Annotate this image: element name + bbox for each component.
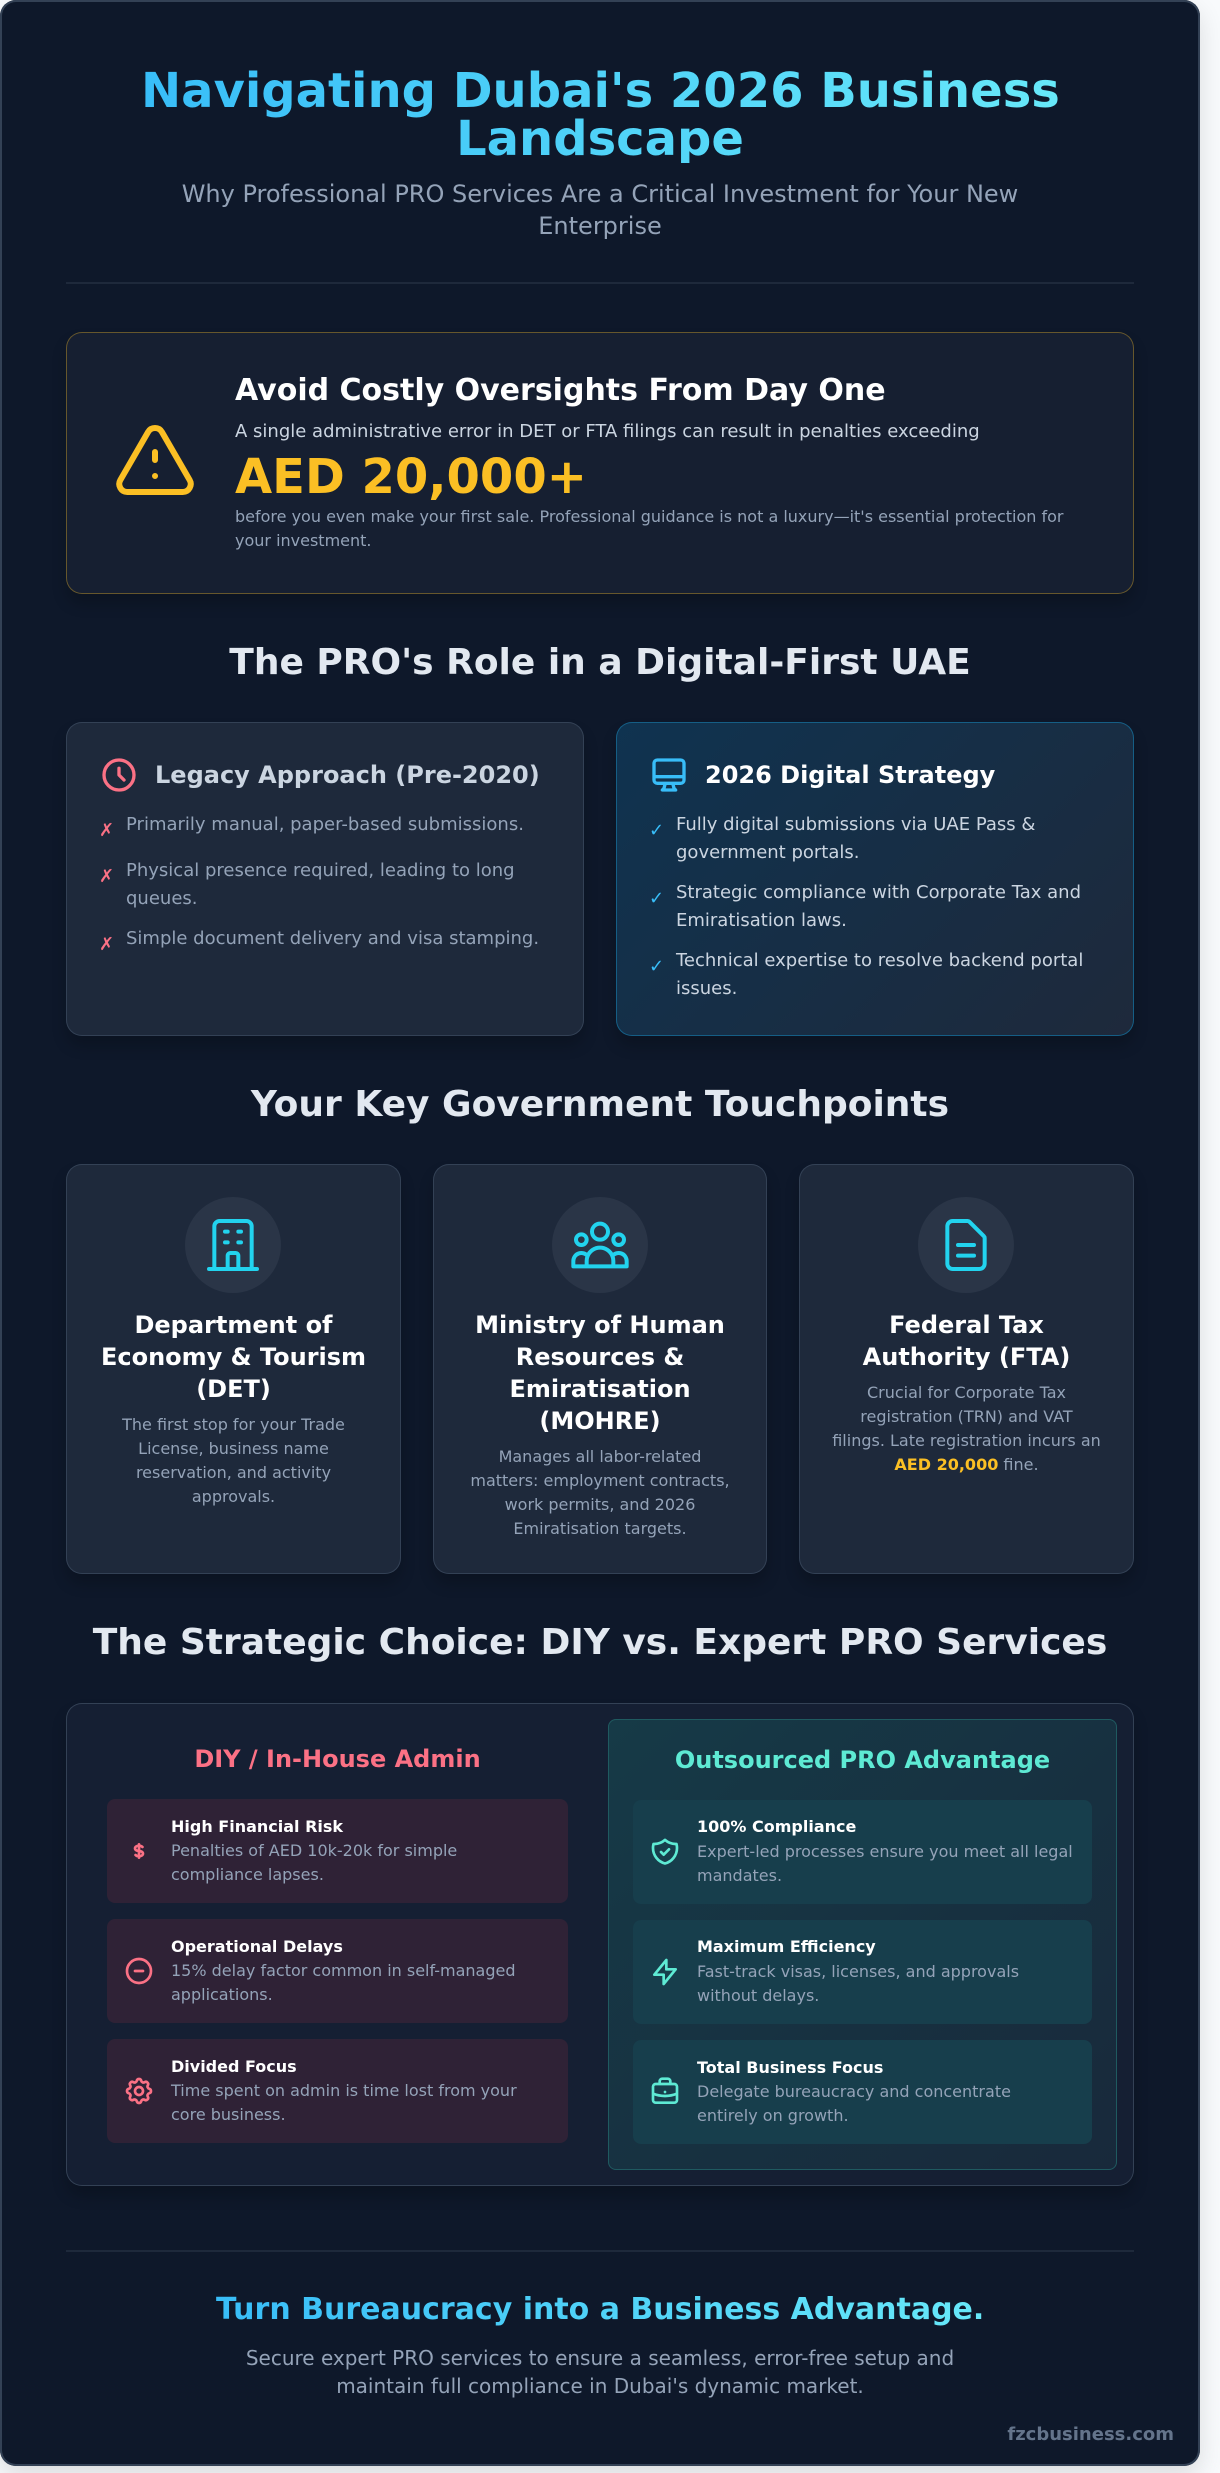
list item: Emiratisation laws. xyxy=(676,910,847,931)
digital heading: 2026 Digital Strategy xyxy=(705,761,995,789)
FTA description: filings. Late registration incurs an xyxy=(832,1431,1101,1450)
item description xyxy=(171,1961,516,2004)
list item xyxy=(126,860,515,909)
DIY item: delays xyxy=(107,1919,568,2023)
icon: briefcase xyxy=(652,2077,678,2104)
list marker: ✓ xyxy=(649,956,664,977)
list item xyxy=(676,950,1083,999)
divider under header xyxy=(66,282,1134,284)
icon: document xyxy=(945,1219,987,1271)
alert figure: AED 20,000+ xyxy=(235,449,587,505)
alert note xyxy=(235,507,1064,550)
MOHRE title: (MOHRE) xyxy=(539,1407,661,1435)
list item: Fully digital submissions via UAE Pass & xyxy=(676,814,1035,835)
FTA title xyxy=(862,1311,1070,1371)
DET description: approvals. xyxy=(192,1487,275,1506)
icon: clock xyxy=(102,758,136,792)
MOHRE description: matters: employment contracts, xyxy=(470,1471,730,1490)
MOHRE title xyxy=(475,1311,725,1435)
item title: Operational Delays xyxy=(171,1937,343,1956)
icon: desktop xyxy=(652,758,686,792)
MOHRE description: Manages all labor-related xyxy=(499,1447,701,1466)
legacy heading: Legacy Approach (Pre-2020) xyxy=(155,761,540,789)
legacy list xyxy=(99,814,539,955)
list marker: ✓ xyxy=(649,888,664,909)
item title: High Financial Risk xyxy=(171,1817,343,1836)
PRO item: efficiency xyxy=(633,1920,1092,2024)
MOHRE description: work permits, and 2026 xyxy=(505,1495,695,1514)
FTA description xyxy=(832,1383,1101,1474)
DIY item: focus xyxy=(107,2039,568,2143)
watermark: fzcbusiness.com xyxy=(1007,2424,1174,2445)
item description: Fast-track visas, licenses, and approvals xyxy=(697,1962,1019,1981)
list marker: ✗ xyxy=(99,866,114,887)
list marker: ✓ xyxy=(649,820,664,841)
MOHRE description: Emiratisation targets. xyxy=(513,1519,687,1538)
footer text: Secure expert PRO services to ensure a seamless, error-free setup and xyxy=(246,2346,954,2370)
panel: outsourced advantage xyxy=(608,1719,1117,2170)
subtitle: Enterprise xyxy=(538,212,662,240)
section heading: strategic choice: The Strategic Choice: DIY vs. Expert PRO Services xyxy=(93,1622,1107,1663)
icon: shield xyxy=(652,1838,678,1865)
list item: Simple document delivery and visa stamping. xyxy=(126,928,539,949)
item description xyxy=(170,2081,517,2124)
item description: Penalties of AED 10k-20k for simple xyxy=(171,1841,457,1860)
DET description: License, business name xyxy=(138,1439,329,1458)
DET title xyxy=(101,1311,366,1403)
divider above footer xyxy=(66,2250,1134,2252)
section heading: touchpoints: Your Key Government Touchpoints xyxy=(251,1084,949,1125)
item description: compliance lapses. xyxy=(171,1865,324,1884)
DET description xyxy=(122,1415,345,1506)
icon circle: document xyxy=(918,1197,1014,1293)
PRO heading: Outsourced PRO Advantage xyxy=(675,1746,1050,1774)
MOHRE title: Resources & xyxy=(516,1343,684,1371)
list item: Strategic compliance with Corporate Tax and xyxy=(676,882,1081,903)
FTA title: Authority (FTA) xyxy=(863,1343,1070,1371)
title: Landscape xyxy=(456,111,744,167)
PRO item: business focus xyxy=(633,2040,1092,2144)
title: Navigating Dubai's 2026 Business xyxy=(141,63,1060,119)
footer text: maintain full compliance in Dubai's dynamic market. xyxy=(336,2374,864,2398)
MOHRE description xyxy=(470,1447,730,1538)
FTA description: registration (TRN) and VAT xyxy=(860,1407,1073,1426)
icon: people xyxy=(571,1222,629,1268)
alert heading: Avoid Costly Oversights From Day One xyxy=(235,373,886,408)
item title: Maximum Efficiency xyxy=(697,1937,876,1956)
item description: Delegate bureaucracy and concentrate xyxy=(697,2082,1011,2101)
DET title: (DET) xyxy=(196,1375,271,1403)
MOHRE title: Ministry of Human xyxy=(475,1311,725,1339)
item description: entirely on growth. xyxy=(697,2106,849,2125)
FTA description: Crucial for Corporate Tax xyxy=(867,1383,1066,1402)
icon: warning triangle xyxy=(116,425,194,495)
DET description: The first stop for your Trade xyxy=(122,1415,345,1434)
item description: applications. xyxy=(171,1985,273,2004)
list item: Technical expertise to resolve backend portal xyxy=(676,950,1083,971)
digital list xyxy=(649,814,1083,999)
panel: legacy approach xyxy=(66,722,584,1036)
item description xyxy=(171,1841,457,1884)
FTA description: AED 20,000 fine. xyxy=(894,1455,1039,1474)
item description: core business. xyxy=(171,2105,286,2124)
list marker: ✗ xyxy=(99,934,114,955)
icon circle: building xyxy=(185,1197,281,1293)
item description: Time spent on admin is time lost from your xyxy=(171,2081,517,2100)
footer heading: Turn Bureaucracy into a Business Advantage. xyxy=(216,2292,984,2327)
list item: Physical presence required, leading to long xyxy=(126,860,515,881)
icon: gear xyxy=(126,2078,152,2104)
list item: issues. xyxy=(676,978,737,999)
list item xyxy=(676,814,1035,863)
item description: without delays. xyxy=(697,1986,819,2005)
alert note: before you even make your first sale. Professional guidance is not a luxury—it's essential protection for xyxy=(235,507,1064,526)
list item: government portals. xyxy=(676,842,859,863)
list marker: ✗ xyxy=(99,820,114,841)
list item: queues. xyxy=(126,888,198,909)
subtitle: Why Professional PRO Services Are a Critical Investment for Your New xyxy=(182,180,1018,208)
panel: digital strategy xyxy=(616,722,1134,1036)
item description xyxy=(697,2082,1011,2125)
FTA title: Federal Tax xyxy=(889,1311,1044,1339)
list item xyxy=(676,882,1081,931)
icon: dollar xyxy=(134,1843,144,1859)
item description: 15% delay factor common in self-managed xyxy=(171,1961,516,1980)
DET title: Department of xyxy=(134,1311,332,1339)
panel: MOHRE card xyxy=(433,1164,767,1574)
alert panel xyxy=(66,332,1134,594)
icon: building xyxy=(207,1219,259,1271)
alert note: your investment. xyxy=(235,531,372,550)
panel: DET card xyxy=(66,1164,401,1574)
DIY heading: DIY / In-House Admin xyxy=(194,1745,481,1773)
DIY item: financial risk xyxy=(107,1799,568,1903)
alert text: A single administrative error in DET or FTA filings can result in penalties exceeding xyxy=(235,421,980,442)
item description xyxy=(697,1962,1019,2005)
item title: 100% Compliance xyxy=(697,1817,856,1836)
footer text xyxy=(246,2346,954,2398)
subtitle xyxy=(182,180,1018,240)
item title: Divided Focus xyxy=(171,2057,297,2076)
PRO item: compliance xyxy=(633,1800,1092,1904)
title xyxy=(141,67,1059,163)
MOHRE title: Emiratisation xyxy=(509,1375,691,1403)
item description xyxy=(697,1842,1073,1885)
DET title: Economy & Tourism xyxy=(101,1343,366,1371)
icon: minus circle xyxy=(126,1958,152,1984)
DET description: reservation, and activity xyxy=(136,1463,331,1482)
icon circle: people xyxy=(552,1197,648,1293)
icon: lightning xyxy=(652,1958,678,1986)
panel: comparison xyxy=(66,1703,1134,2186)
panel: FTA card xyxy=(799,1164,1134,1574)
item description: mandates. xyxy=(697,1866,782,1885)
item description: Expert-led processes ensure you meet all legal xyxy=(697,1842,1073,1861)
list item: Primarily manual, paper-based submissions. xyxy=(126,814,524,835)
item title: Total Business Focus xyxy=(697,2058,883,2077)
section heading: PRO role: The PRO's Role in a Digital-First UAE xyxy=(229,642,971,683)
